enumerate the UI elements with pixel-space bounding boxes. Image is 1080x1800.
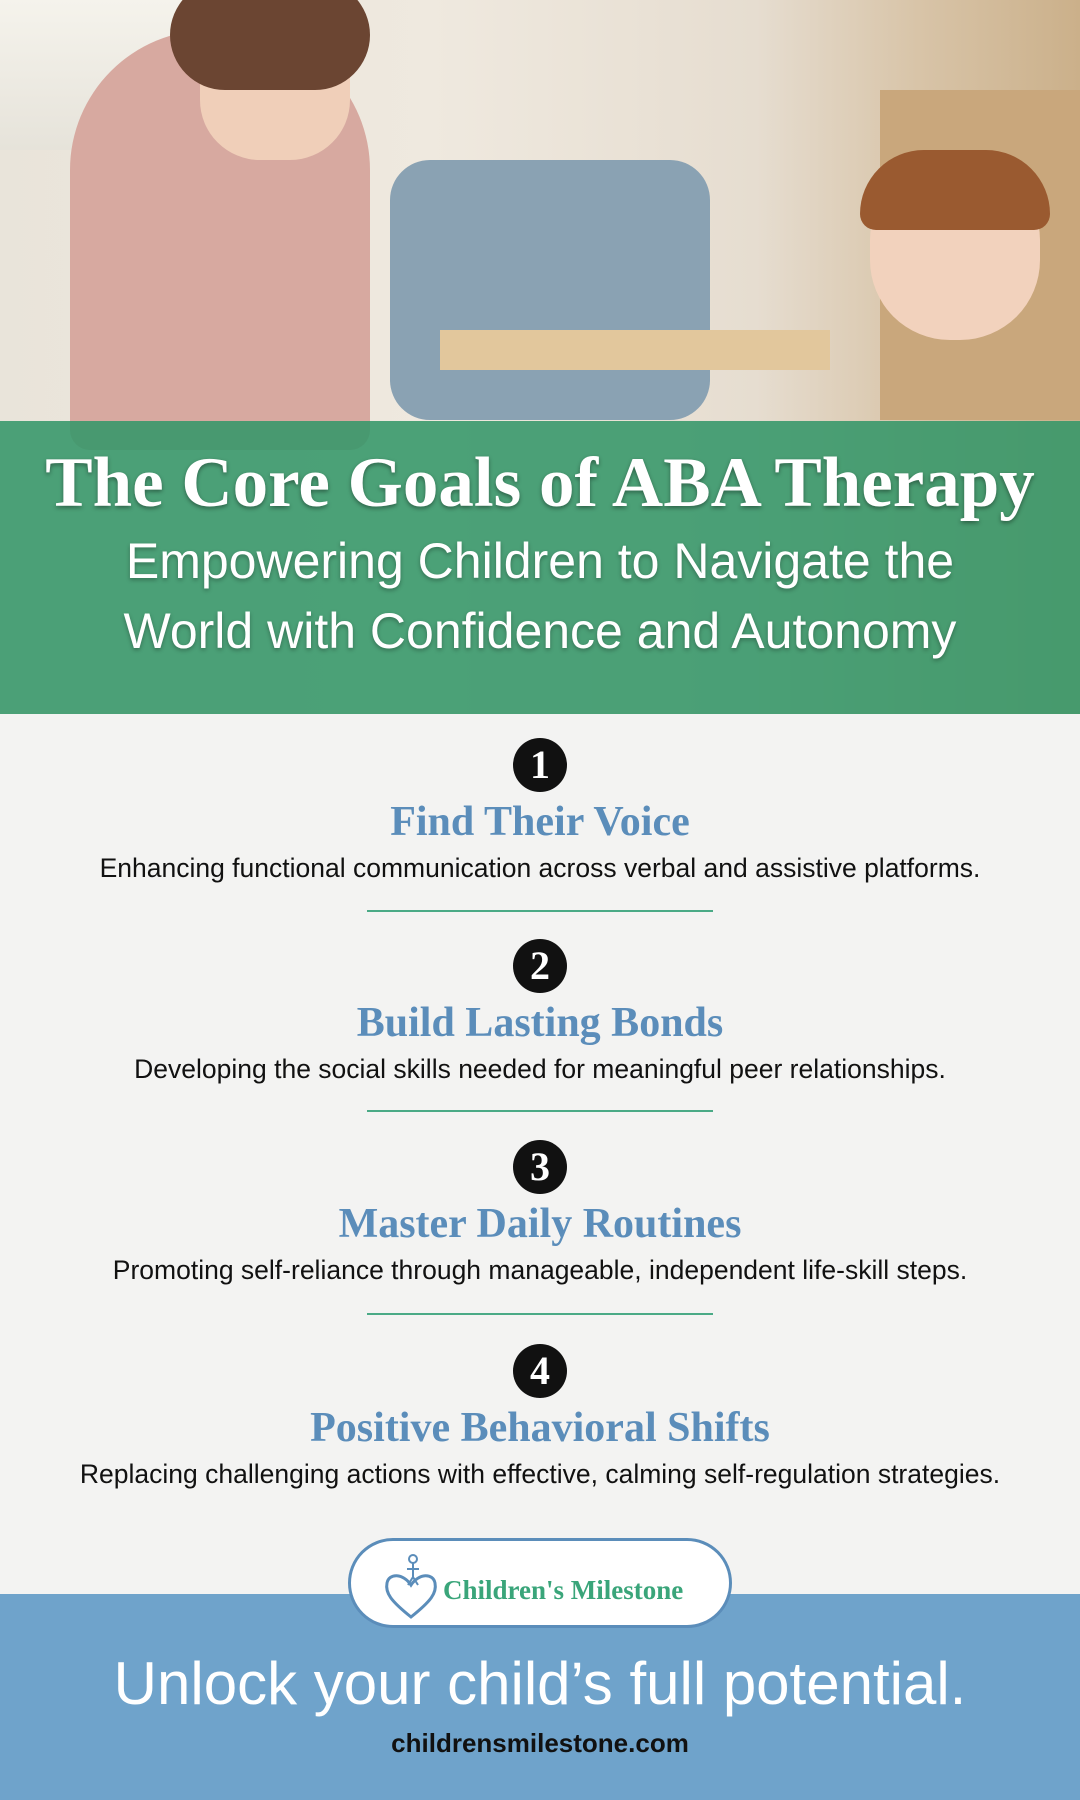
heading 4: Positive Behavioral Shifts: [310, 1405, 770, 1451]
table: [440, 330, 830, 370]
number 3: 3: [530, 1144, 550, 1189]
goal 3: [113, 1140, 967, 1285]
number 1: [513, 738, 567, 792]
number 1: 1: [530, 742, 550, 787]
subtitle: Empowering Children to Navigate the: [126, 533, 954, 589]
heading 2: Build Lasting Bonds: [357, 1000, 723, 1046]
description 3: Promoting self-reliance through manageable, independent life-skill steps.: [113, 1255, 967, 1285]
url: childrensmilestone.com: [391, 1728, 689, 1758]
footer: [0, 1594, 1080, 1800]
chair: [390, 160, 710, 420]
number 2: 2: [530, 943, 550, 988]
window: [0, 0, 300, 150]
green title band: [0, 421, 1080, 714]
icon: heart: [385, 1554, 437, 1619]
description 2: Developing the social skills needed for meaningful peer relationships.: [134, 1054, 946, 1084]
number 4: 4: [530, 1348, 550, 1393]
number 2: [513, 939, 567, 993]
goal 1: [100, 738, 980, 883]
goal 4: [80, 1344, 1000, 1489]
number 4: [513, 1344, 567, 1398]
logo pill: [348, 1538, 732, 1628]
number 3: [513, 1140, 567, 1194]
description 4: Replacing challenging actions with effective, calming self-regulation strategies.: [80, 1459, 1000, 1489]
tagline: Unlock your child’s full potential.: [114, 1650, 966, 1717]
shelf: [880, 90, 1080, 420]
heading 1: Find Their Voice: [390, 799, 690, 845]
woman: [70, 30, 370, 450]
title: The Core Goals of ABA Therapy: [45, 444, 1035, 522]
goal 2: [134, 939, 946, 1084]
logo text: Children's Milestone: [443, 1575, 683, 1605]
hero photo: [0, 0, 1080, 714]
child: [870, 160, 1040, 340]
subtitle: [122, 533, 957, 662]
subtitle: World with Confidence and Autonomy: [124, 603, 956, 659]
heading 3: Master Daily Routines: [339, 1201, 741, 1247]
description 1: Enhancing functional communication across verbal and assistive platforms.: [100, 853, 980, 883]
